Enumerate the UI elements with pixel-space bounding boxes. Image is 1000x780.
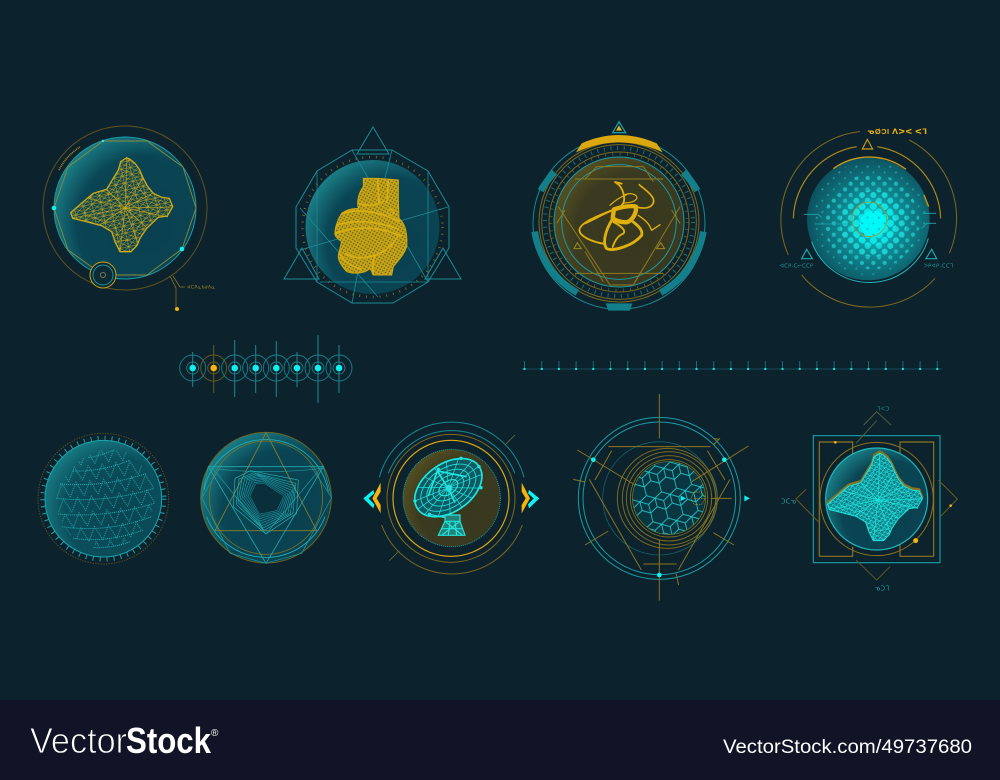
arc caption marks xyxy=(59,147,80,170)
outer teal arcs xyxy=(379,422,524,477)
tick ring xyxy=(302,157,442,297)
bottom chevron xyxy=(856,560,890,580)
triangles xyxy=(284,127,461,279)
bottom tab xyxy=(606,303,632,311)
centre ring xyxy=(852,202,887,237)
sphere body xyxy=(632,462,706,535)
outer ring xyxy=(43,126,207,290)
footer logo: Vector xyxy=(30,720,127,761)
dial icon xyxy=(90,262,116,288)
widget 1: gold mountain sphere xyxy=(43,126,215,311)
dish nodes xyxy=(413,457,483,516)
widget 9: square frame mountain xyxy=(796,412,957,580)
footer id: VectorStock.com/49737680 xyxy=(723,737,972,758)
nodes xyxy=(52,140,184,251)
dish xyxy=(404,447,493,535)
widget 7: radar dish dial xyxy=(363,422,539,574)
outer rings xyxy=(578,417,740,579)
sphere edge arcs xyxy=(833,157,929,207)
right chevron xyxy=(938,480,957,516)
outer gold arcs xyxy=(781,132,957,307)
cyan nodes xyxy=(591,457,750,577)
leader line and dot xyxy=(170,276,215,311)
small triangles xyxy=(574,243,665,249)
olive disk xyxy=(403,449,500,547)
cyan mountain xyxy=(828,451,923,541)
hex mesh xyxy=(632,462,706,534)
gold nodes xyxy=(834,441,952,543)
footer logo xyxy=(30,720,219,761)
node rings xyxy=(180,355,352,381)
gold tiny nodes xyxy=(691,492,705,504)
label: widget 9 bottom: ᓀᑐᒣ xyxy=(875,586,890,592)
footer bar xyxy=(0,700,1000,780)
gold ring xyxy=(820,442,933,556)
triangles xyxy=(802,139,937,259)
diagonal ticks xyxy=(389,435,515,561)
sphere xyxy=(45,440,162,557)
rings xyxy=(533,137,705,309)
gold triangle xyxy=(215,433,317,531)
footer logo: ® xyxy=(211,728,219,739)
crossing lines xyxy=(300,150,448,303)
sphere xyxy=(201,432,331,563)
thick teal arcs xyxy=(535,172,703,293)
tick ring xyxy=(43,438,164,559)
label: widget 9 left: ᑐᑕᓀ xyxy=(781,498,796,506)
label: widget 9 top: ᒣᐸᑐ xyxy=(877,406,890,412)
widget 4: halftone sphere xyxy=(781,132,957,307)
dodecagon frame xyxy=(296,150,449,303)
nested polygons xyxy=(233,471,298,534)
footer logo: Stock xyxy=(126,720,212,761)
middle gold arcs xyxy=(793,147,941,218)
node dots xyxy=(189,365,342,371)
left chevron xyxy=(796,489,818,522)
outer ring xyxy=(38,433,169,564)
node indicators row xyxy=(180,335,352,403)
gold node ring xyxy=(201,355,227,381)
olive disk xyxy=(554,157,684,287)
widget 8 overlay lines xyxy=(573,394,750,601)
sphere xyxy=(826,448,928,550)
inner teal ring xyxy=(562,165,676,279)
widget 8: hex mesh sphere with target xyxy=(578,417,740,579)
top gold arc xyxy=(576,135,663,152)
gold ring xyxy=(393,440,509,556)
dish pedestal xyxy=(430,514,465,535)
gold frame lines xyxy=(573,394,748,601)
right chevrons xyxy=(522,483,539,513)
sphere xyxy=(306,160,440,294)
label: widget 4 left: ᐊᑕᑭ-ᑕᓕᑕᑕᑭ xyxy=(780,264,813,270)
latitude curves xyxy=(57,449,154,547)
knee model xyxy=(335,178,407,275)
teal triangle xyxy=(208,467,323,563)
halftone dots xyxy=(816,162,926,275)
label: widget 4 right: ᐳᑭᐊᑭ-ᑕᑕᒣ xyxy=(924,264,953,270)
top triangle xyxy=(613,122,626,133)
gold decagon xyxy=(54,141,196,275)
widget 3: ink star dial xyxy=(533,122,705,311)
top chevrons xyxy=(856,412,891,443)
concentric gold rings xyxy=(617,448,717,548)
inner rings xyxy=(204,440,328,557)
outer teal square xyxy=(813,436,940,563)
left chevrons xyxy=(363,483,381,513)
widget 2: knee mesh sphere xyxy=(284,127,461,303)
leader line and dot: ᐊᑕᑭᓇᑲᑯᐱᓇ xyxy=(187,284,215,290)
node lines xyxy=(193,335,339,403)
outer gold arcs xyxy=(382,525,522,574)
label: widget 4 top: ᓀØƆI ᐱᐳᐸ ᐸᒣ xyxy=(867,127,927,136)
widget 5: dotted geodesic sphere xyxy=(38,433,169,564)
gold hud lines xyxy=(557,167,680,285)
wireframe mountain xyxy=(71,158,173,252)
zigzag mesh xyxy=(56,450,155,547)
teal hexagram lines xyxy=(202,465,332,563)
side lines xyxy=(804,213,936,228)
sphere xyxy=(807,158,930,280)
gold brackets xyxy=(819,442,934,556)
ruler xyxy=(522,365,942,369)
widget 6: sacred geometry sphere xyxy=(201,432,332,563)
sphere xyxy=(54,137,196,279)
ink star shape xyxy=(579,182,660,250)
